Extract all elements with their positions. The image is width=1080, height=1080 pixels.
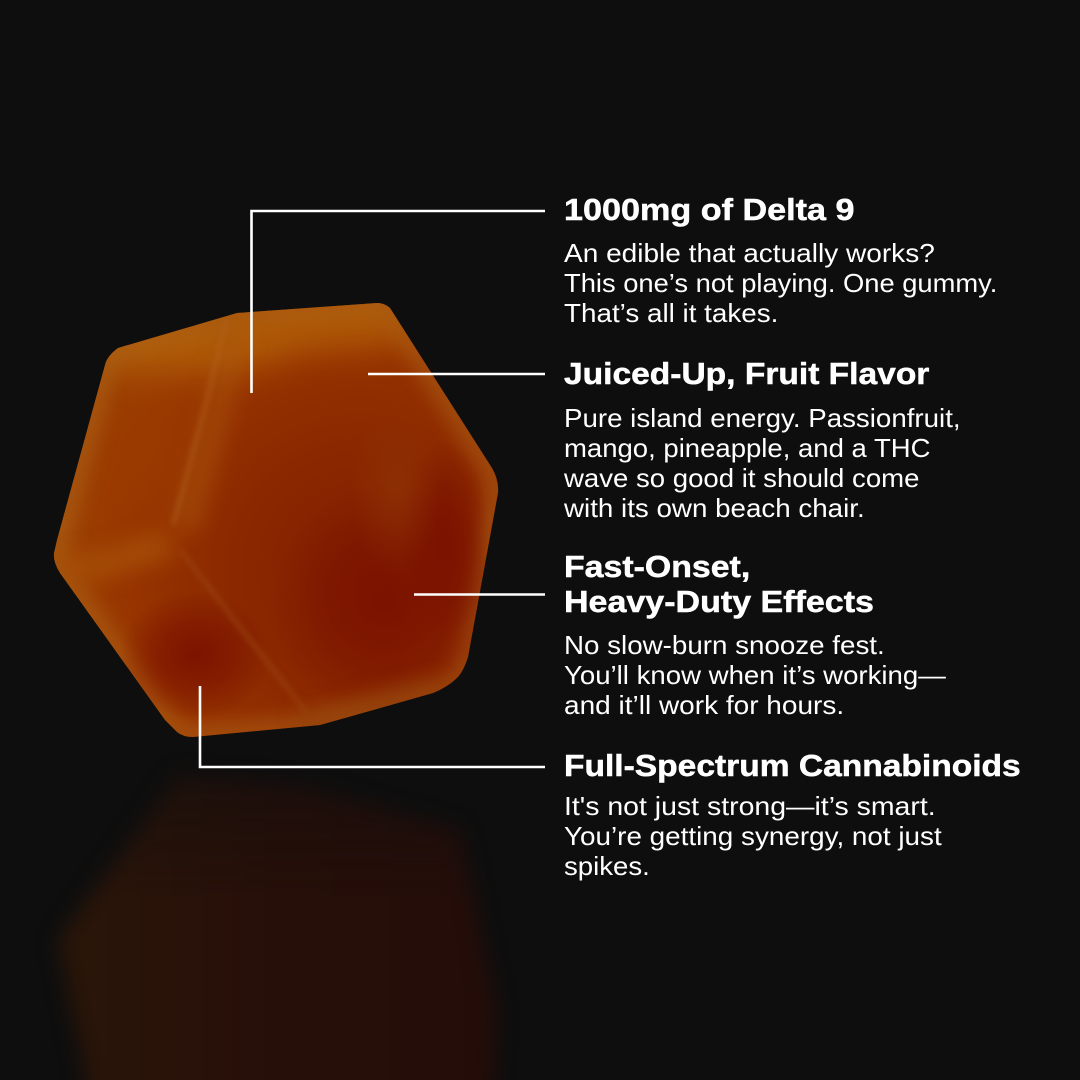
dark spot right face bbox=[314, 533, 480, 682]
heading: Fast-Onset, Heavy-Duty Effects: Fast-Onset, bbox=[564, 550, 750, 584]
bottom crease bbox=[186, 558, 300, 704]
callout line: cannabinoids bbox=[200, 686, 545, 767]
heading: Fast-Onset, Heavy-Duty Effects: Heavy-Duty Effects bbox=[564, 585, 874, 619]
gummy body bbox=[45, 295, 500, 737]
body text: Delta 9: That’s all it takes. bbox=[564, 298, 778, 328]
body text: effects bbox=[564, 630, 946, 720]
body text: flavor: with its own beach chair. bbox=[564, 493, 865, 523]
body text: cannabinoids bbox=[564, 791, 942, 881]
callout line: effects bbox=[414, 593, 545, 596]
body text: flavor: Pure island energy. Passionfruit, bbox=[564, 403, 961, 433]
body text: cannabinoids: You’re getting synergy, not just bbox=[564, 821, 942, 851]
dark spot bottom left bbox=[130, 606, 248, 706]
body text: Delta 9 bbox=[564, 238, 997, 328]
left face shading bbox=[78, 388, 99, 461]
top crease bbox=[172, 380, 212, 524]
body text: Delta 9: This one’s not playing. One gummy. bbox=[564, 268, 997, 298]
body text: flavor bbox=[564, 403, 961, 523]
gummy reflection bbox=[58, 775, 496, 1080]
soft light beside top crease bbox=[179, 378, 234, 528]
bottom edge band bbox=[300, 692, 440, 728]
left crease bbox=[60, 543, 170, 570]
body text: cannabinoids: spikes. bbox=[564, 851, 650, 881]
edge glow bbox=[54, 303, 498, 737]
heading: Juiced-Up, Fruit Flavor: Juiced-Up, Fruit Flavor bbox=[564, 357, 929, 391]
body text: cannabinoids: It's not just strong—it’s smart. bbox=[564, 791, 936, 821]
gummy illustration with callout lines bbox=[54, 210, 545, 1080]
body text: effects: No slow-burn snooze fest. bbox=[564, 630, 885, 660]
top glow bbox=[100, 295, 420, 370]
heading: 1000mg of Delta 9: 1000mg of Delta 9 bbox=[564, 193, 854, 227]
heading: Full-Spectrum Cannabinoids: Full-Spectrum Cannabinoids bbox=[564, 749, 1021, 783]
heading: Fast-Onset, Heavy-Duty Effects bbox=[564, 550, 874, 619]
callout line: Delta 9 bbox=[252, 211, 545, 393]
body text: effects: and it’ll work for hours. bbox=[564, 690, 844, 720]
callout line: flavor bbox=[368, 373, 545, 375]
body text: flavor: mango, pineapple, and a THC bbox=[564, 433, 931, 463]
body text: flavor: wave so good it should come bbox=[564, 463, 919, 493]
light swath bbox=[380, 481, 412, 532]
body text: effects: You’ll know when it’s working— bbox=[564, 660, 946, 690]
body text: Delta 9: An edible that actually works? bbox=[564, 238, 935, 268]
